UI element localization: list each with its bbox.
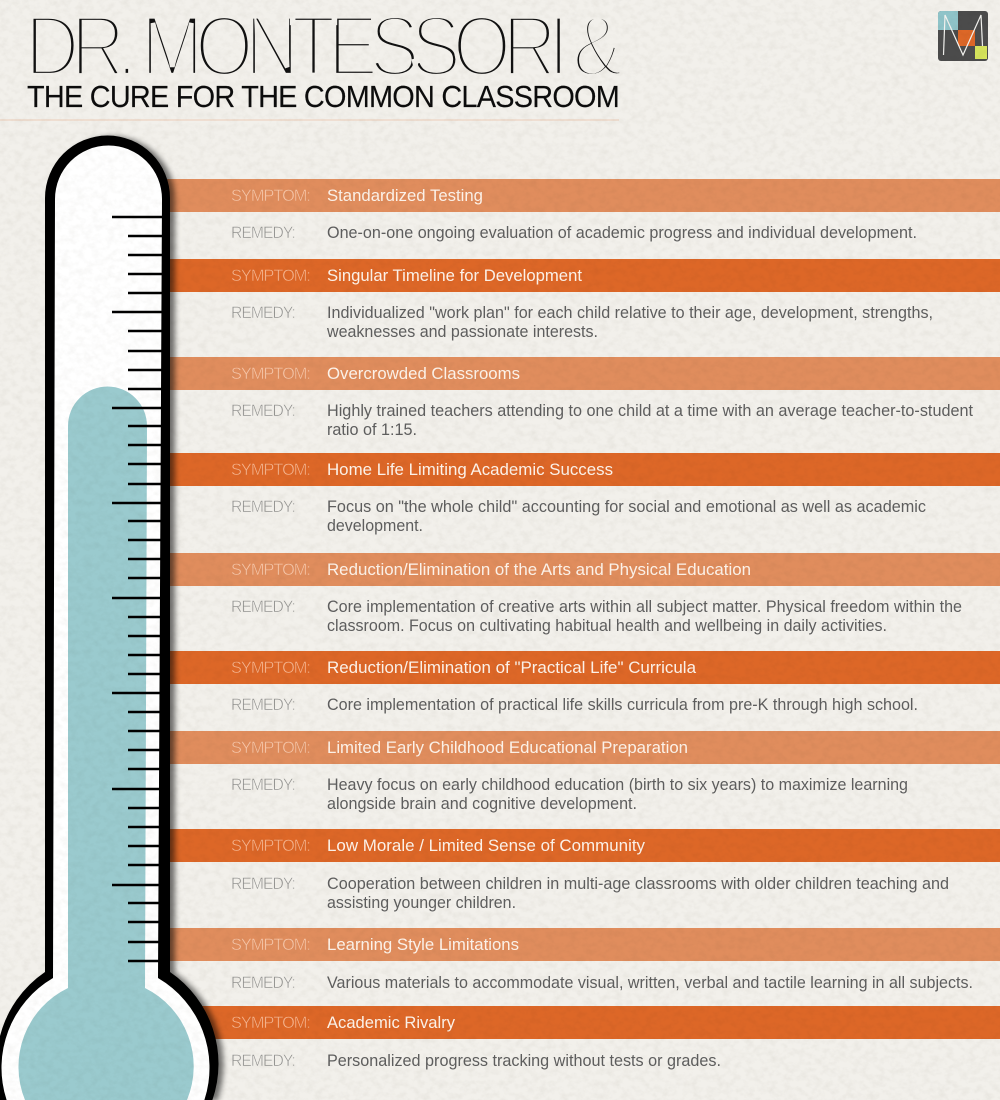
symptom and remedy 10: SYMPTOM: <box>231 1013 310 1032</box>
symptom and remedy 6: Core implementation of practical life skills curricula from pre-K through high school. <box>327 696 918 714</box>
symptom and remedy 5 <box>231 560 962 635</box>
symptom and remedy 7: SYMPTOM: <box>231 738 310 757</box>
thermometer ticks <box>112 217 165 961</box>
symptom and remedy 8: Cooperation between children in multi-age classrooms with older children teaching and <box>327 875 949 893</box>
symptom and remedy 7: Limited Early Childhood Educational Preparation <box>327 739 688 757</box>
symptom and remedy 10: Personalized progress tracking without tests or grades. <box>327 1052 721 1070</box>
symptom and remedy 4: Focus on "the whole child" accounting for social and emotional as well as academic <box>327 498 926 516</box>
symptom and remedy 3: Highly trained teachers attending to one child at a time with an average teacher-to-student <box>327 402 973 420</box>
symptom and remedy 3: SYMPTOM: <box>231 364 310 383</box>
symptom and remedy 8 <box>231 836 949 912</box>
symptom and remedy 1: One-on-one ongoing evaluation of academic progress and individual development. <box>327 224 917 242</box>
symptom and remedy 3: Overcrowded Classrooms <box>327 365 520 383</box>
symptom and remedy 3: ratio of 1:15. <box>327 421 417 439</box>
symptom and remedy 8: REMEDY: <box>231 874 295 893</box>
symptom and remedy 9: SYMPTOM: <box>231 935 310 954</box>
symptom and remedy 6 <box>231 658 918 714</box>
symptom and remedy 10: REMEDY: <box>231 1051 295 1070</box>
symptom and remedy 2: weaknesses and passionate interests. <box>326 323 598 341</box>
symptom and remedy 6: Reduction/Elimination of "Practical Life" Curricula <box>327 659 697 677</box>
symptom and remedy 5: REMEDY: <box>231 597 295 616</box>
symptom and remedy 1: SYMPTOM: <box>231 186 310 205</box>
symptom and remedy 7: REMEDY: <box>231 775 295 794</box>
symptom and remedy 2: REMEDY: <box>231 303 295 322</box>
symptom and remedy 1: Standardized Testing <box>327 187 483 205</box>
symptom and remedy 9: REMEDY: <box>231 973 295 992</box>
symptom and remedy 10 <box>231 1013 721 1070</box>
thermometer casing <box>0 136 218 1100</box>
symptom and remedy 10: Academic Rivalry <box>327 1014 456 1032</box>
logo <box>938 11 988 61</box>
symptom and remedy 6: REMEDY: <box>231 695 295 714</box>
thermometer liquid <box>18 386 194 1100</box>
symptom and remedy 5: classroom. Focus on cultivating habitual health and wellbeing in daily activities. <box>327 617 887 635</box>
symptom and remedy 4 <box>231 460 926 535</box>
symptom and remedy 4: SYMPTOM: <box>231 460 310 479</box>
symptom and remedy 2: Individualized "work plan" for each child relative to their age, development, strengths, <box>327 304 933 322</box>
symptom and remedy 5: Reduction/Elimination of the Arts and Physical Education <box>327 561 751 579</box>
symptom and remedy 9: Various materials to accommodate visual, written, verbal and tactile learning in all subjects. <box>327 974 973 992</box>
symptom and remedy 6: SYMPTOM: <box>231 658 310 677</box>
title line one: DR. MONTESSORI & <box>25 0 622 94</box>
symptom and remedy 4: REMEDY: <box>231 497 295 516</box>
symptom and remedy 2: SYMPTOM: <box>231 266 310 285</box>
symptom and remedy 7: alongside brain and cognitive development. <box>327 795 637 813</box>
symptom and remedy 3: REMEDY: <box>231 401 295 420</box>
symptom and remedy 1: REMEDY: <box>231 223 295 242</box>
title line two: THE CURE FOR THE COMMON CLASSROOM <box>27 79 619 114</box>
symptom and remedy 4: development. <box>327 517 423 535</box>
symptom and remedy 8: Low Morale / Limited Sense of Community <box>327 837 646 855</box>
thermometer <box>0 136 218 1100</box>
thermometer glass <box>1 145 210 1100</box>
symptom and remedy 2 <box>231 266 933 341</box>
symptom and remedy 8: assisting younger children. <box>327 894 516 912</box>
symptom and remedy 7: Heavy focus on early childhood education (birth to six years) to maximize learning <box>327 776 908 794</box>
symptom and remedy 3 <box>231 364 973 439</box>
symptom and remedy 5: SYMPTOM: <box>231 560 310 579</box>
symptom and remedy 9: Learning Style Limitations <box>327 936 519 954</box>
symptom and remedy 8: SYMPTOM: <box>231 836 310 855</box>
symptom and remedy 5: Core implementation of creative arts within all subject matter. Physical freedom within the <box>327 598 962 616</box>
symptom and remedy 7 <box>231 738 908 813</box>
symptom bars <box>150 179 1000 1039</box>
symptom and remedy 2: Singular Timeline for Development <box>327 267 582 285</box>
symptom and remedy 4: Home Life Limiting Academic Success <box>327 461 613 479</box>
symptom and remedy 1 <box>231 186 917 242</box>
title <box>25 0 622 114</box>
symptom and remedy 9 <box>231 935 973 992</box>
